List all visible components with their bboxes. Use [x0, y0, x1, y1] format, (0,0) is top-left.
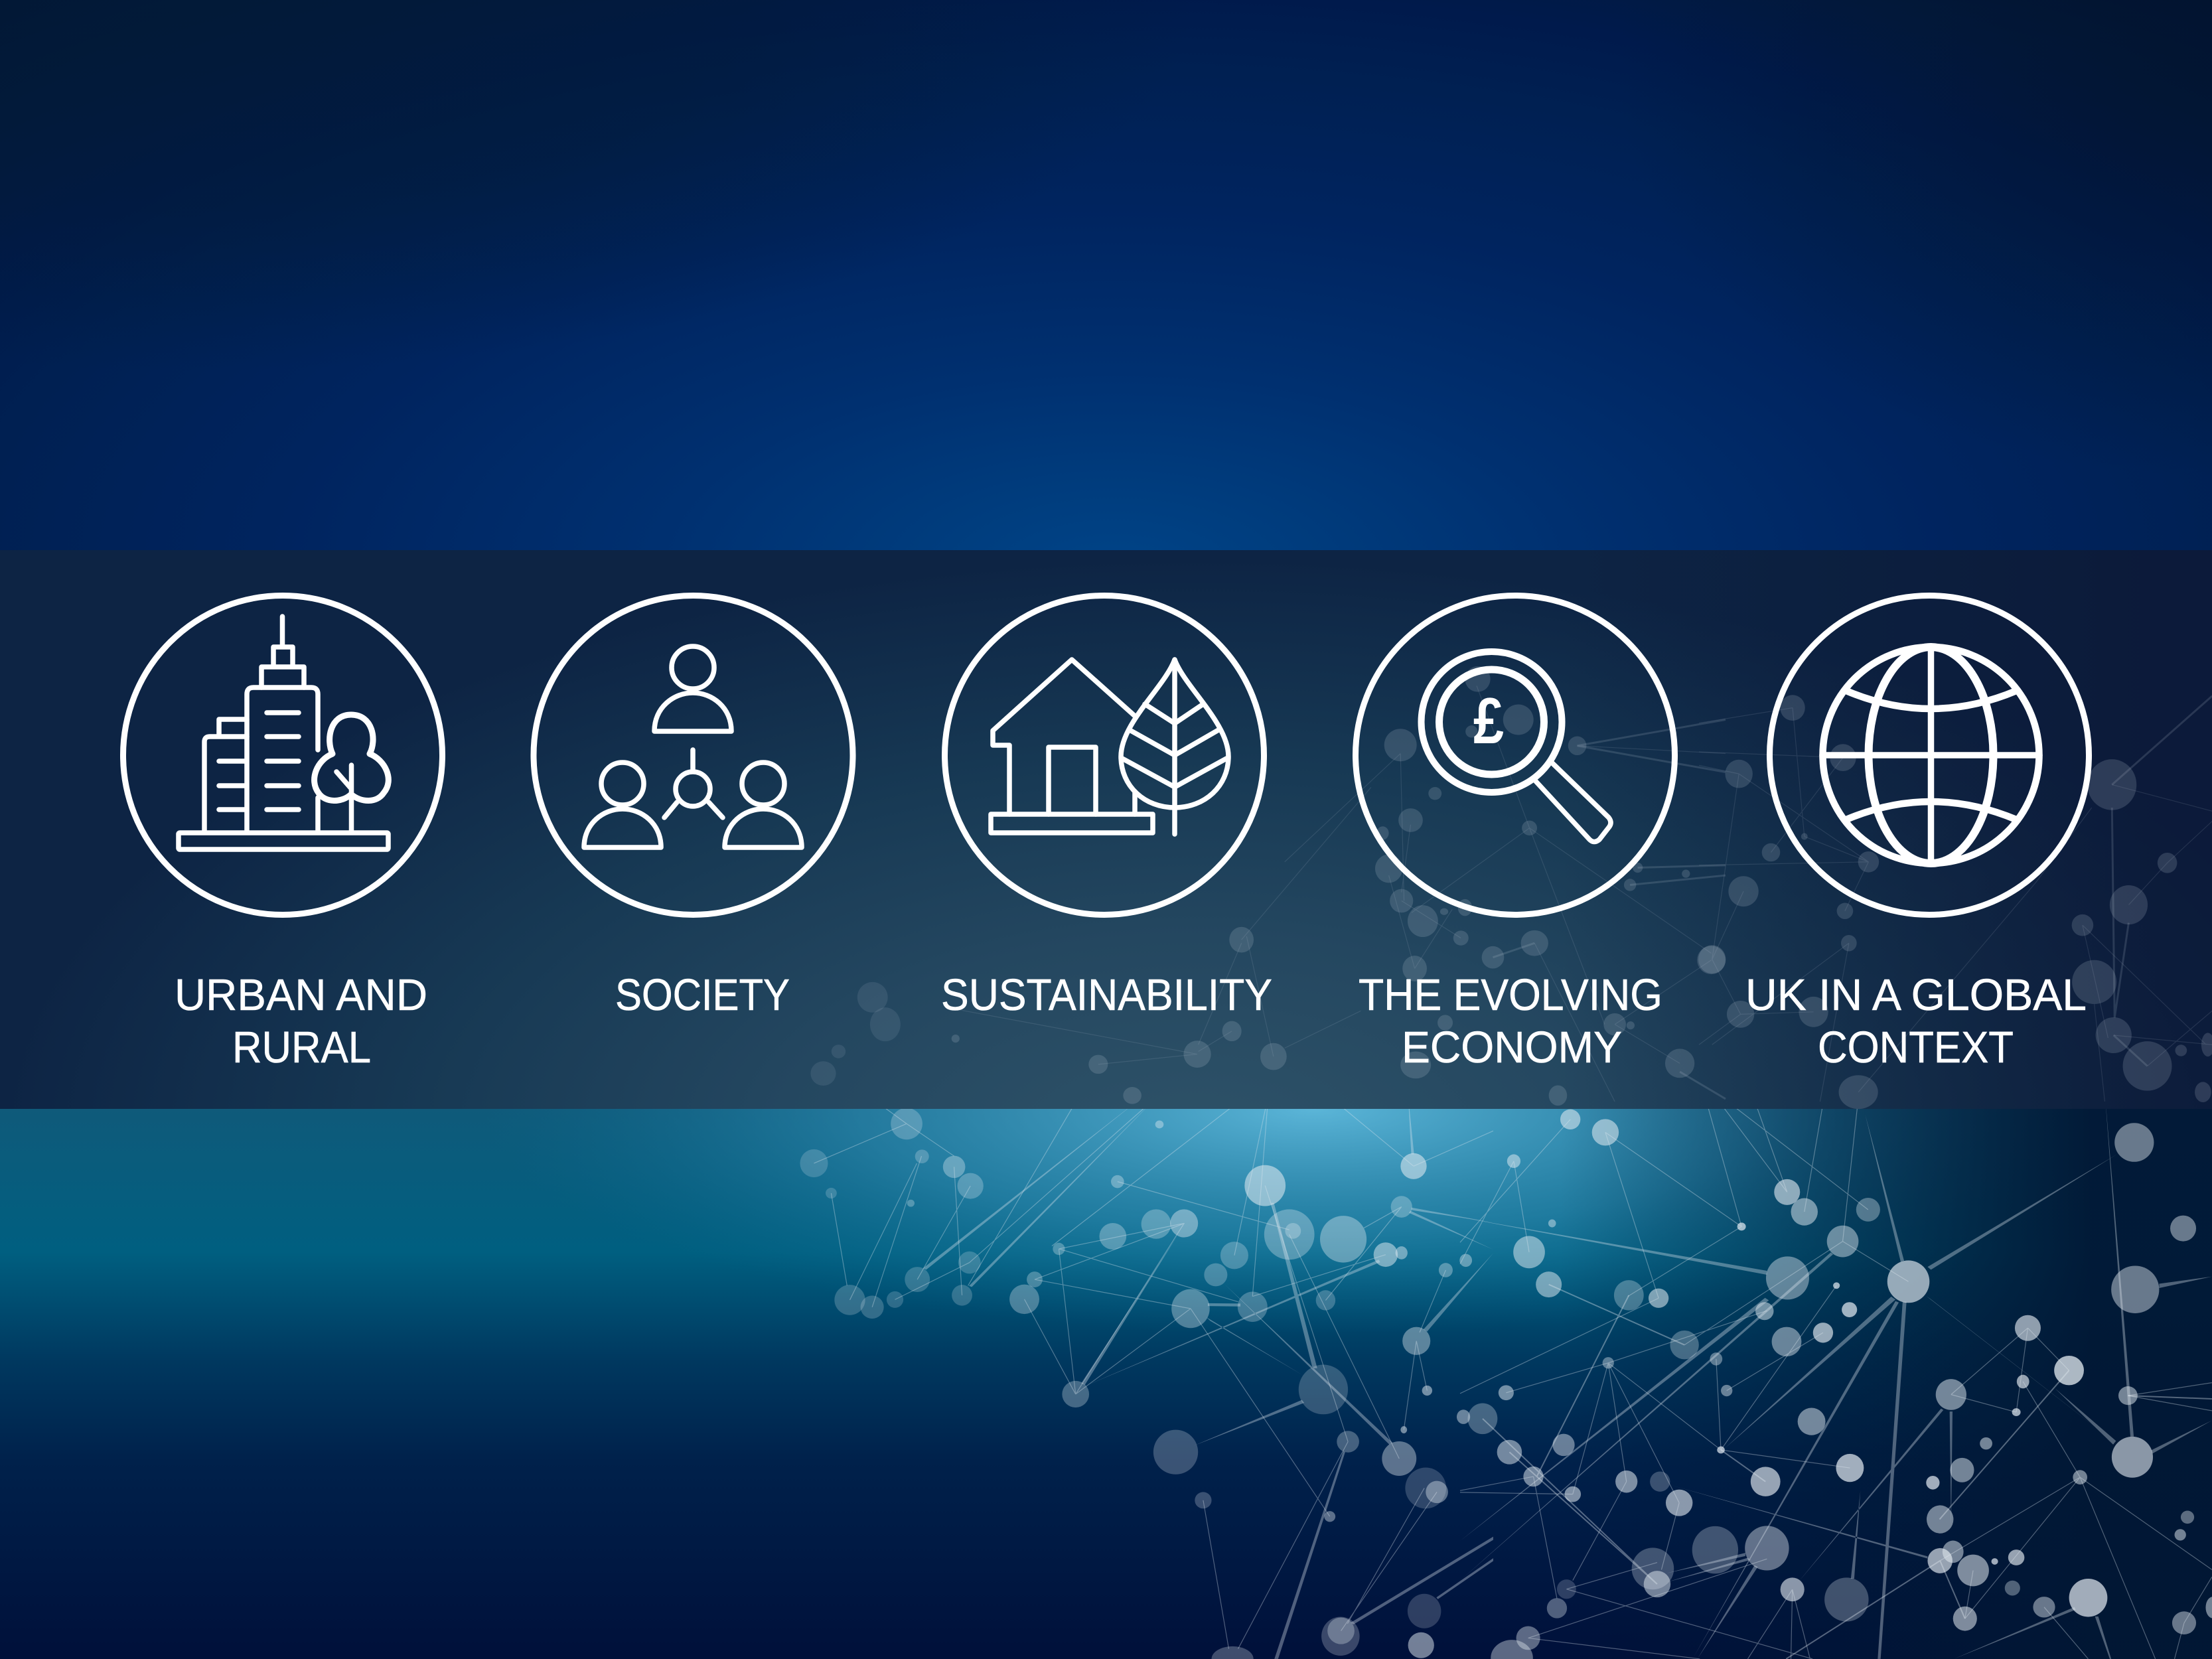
icon: house and leaf in circle [945, 596, 1264, 914]
network graphic: nodes and links in lower area [814, 1095, 2212, 1659]
theme: society [534, 596, 853, 1020]
theme: the evolving economy [1355, 596, 1675, 1072]
label: urban and rural [175, 970, 427, 1072]
label: uk in a global context: CONTEXT [1818, 1023, 2014, 1072]
network graphic: faint links and nodes seen through band [956, 685, 2212, 1102]
theme: urban and rural [123, 596, 442, 1072]
icon: city buildings and tree in circle [123, 596, 442, 914]
label: uk in a global context: UK IN A GLOBAL [1745, 970, 2087, 1020]
label: urban and rural: URBAN AND [175, 970, 427, 1020]
background: lower teal glow [0, 1109, 2212, 1659]
network graphic: node circles [800, 1108, 2212, 1659]
label: uk in a global context [1745, 970, 2087, 1072]
icon: three people connected in circle [534, 596, 853, 914]
label: society: SOCIETY [615, 970, 790, 1020]
icon: magnifying glass with pound sign in circle: £ [1473, 684, 1504, 757]
label: the evolving economy [1359, 970, 1662, 1072]
background: upper blue gradient [0, 0, 2212, 551]
label: the evolving economy: THE EVOLVING [1359, 970, 1662, 1020]
icon: magnifying glass with pound sign in circle [1355, 596, 1675, 914]
theme: uk in a global context [1745, 596, 2089, 1072]
label: urban and rural: RURAL [232, 1023, 371, 1072]
panel: translucent band [0, 550, 2212, 1109]
label: the evolving economy: ECONOMY [1402, 1023, 1622, 1072]
theme: sustainability [941, 596, 1272, 1020]
network graphic: faint band nodes [810, 666, 2212, 1109]
icon: globe in circle [1769, 596, 2089, 914]
label: sustainability: SUSTAINABILITY [941, 970, 1272, 1020]
